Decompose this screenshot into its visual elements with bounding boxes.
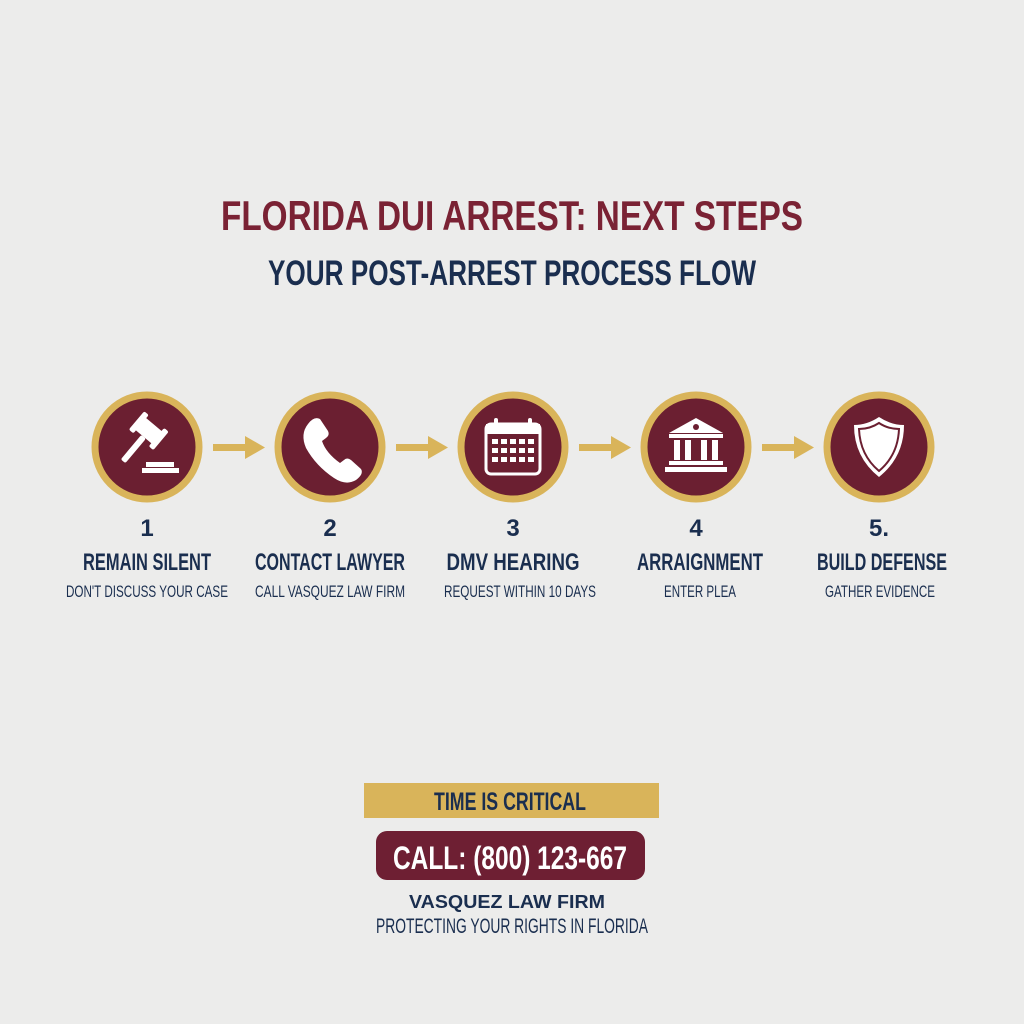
step 3: DMV HEARING	[446, 549, 580, 576]
step 2: CALL VASQUEZ LAW FIRM	[255, 582, 405, 601]
arrow 1	[213, 436, 265, 459]
step 2	[255, 395, 405, 601]
step 2: CONTACT LAWYER	[255, 549, 405, 576]
tagline: PROTECTING YOUR RIGHTS IN FLORIDA	[376, 915, 648, 938]
call box	[376, 831, 645, 880]
step 3: REQUEST WITHIN 10 DAYS	[444, 582, 596, 601]
step 5: 5.	[869, 515, 889, 542]
title: FLORIDA DUI ARREST: NEXT STEPS	[221, 192, 803, 239]
arrow 4	[762, 436, 814, 459]
step 2: 2	[323, 515, 337, 542]
step 4	[637, 395, 763, 601]
subtitle: YOUR POST-ARREST PROCESS FLOW	[268, 254, 756, 293]
step 1: DON'T DISCUSS YOUR CASE	[66, 582, 228, 601]
arrow 2	[396, 436, 448, 459]
step 4: 4	[689, 515, 703, 542]
step 4: ENTER PLEA	[664, 582, 736, 601]
arrow 3	[579, 436, 631, 459]
banner: time is critical: TIME IS CRITICAL	[434, 788, 586, 816]
step 1: REMAIN SILENT	[83, 549, 211, 576]
icon: shield	[827, 395, 931, 499]
step 1: 1	[140, 515, 154, 542]
step 5: BUILD DEFENSE	[817, 549, 947, 576]
call box: CALL: (800) 123-667	[393, 840, 627, 876]
step 4: ARRAIGNMENT	[637, 549, 763, 576]
step 3	[444, 395, 596, 601]
firm name: VASQUEZ LAW FIRM	[409, 892, 605, 912]
banner: time is critical	[364, 783, 659, 818]
icon: gavel	[95, 395, 199, 499]
icon: phone	[278, 395, 382, 499]
step 3: 3	[506, 515, 520, 542]
icon: courthouse	[644, 395, 748, 499]
step 1	[66, 395, 228, 601]
icon: calendar	[461, 395, 565, 499]
step 5	[817, 395, 947, 601]
step 5: GATHER EVIDENCE	[825, 582, 935, 601]
